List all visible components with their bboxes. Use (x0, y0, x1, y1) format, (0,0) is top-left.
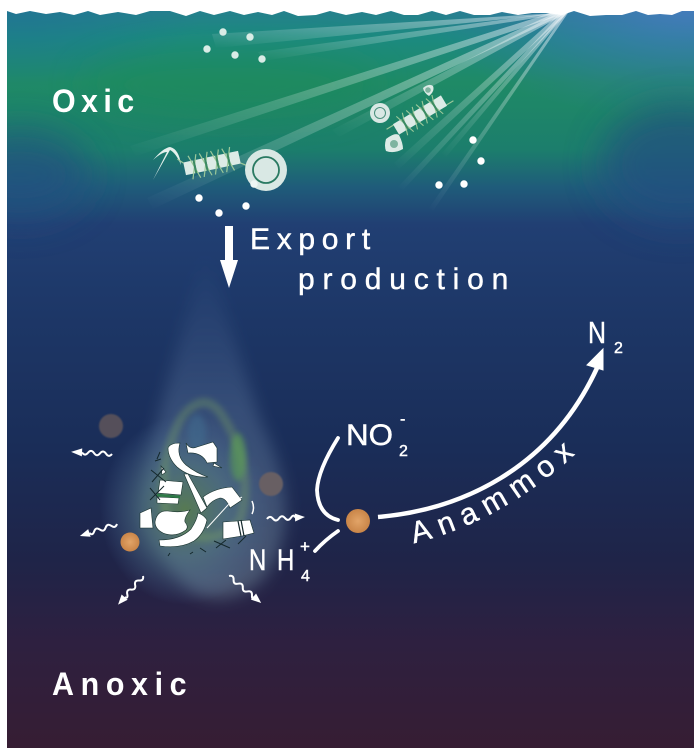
label: Anammox: Anammox (414, 442, 576, 544)
aggregate fine strands (150, 452, 254, 556)
plankton: left round cell (245, 149, 287, 191)
label: NO2-: NO (346, 419, 393, 452)
label: Export production: production (298, 263, 516, 296)
aggregate debris (140, 442, 254, 547)
wavy arrow: right (267, 513, 305, 523)
microbe: dark right (259, 472, 283, 496)
particles: right group (435, 136, 485, 189)
light beams (130, 13, 568, 211)
particles: top group (203, 28, 266, 63)
plankton: left horned cell (153, 147, 181, 180)
wavy arrow: bottom left (115, 573, 146, 607)
reaction lines into bacterium (315, 438, 338, 551)
particles: sinking group (195, 180, 258, 217)
plankton: right triangular cells (385, 85, 434, 152)
label: Export production: Export (250, 223, 377, 256)
label: Export production (250, 223, 516, 296)
microbe: dark upper left (99, 414, 123, 438)
plankton: right round cell (370, 103, 390, 123)
label: NH4+: NH (249, 542, 294, 577)
wavy arrow: lower left (79, 520, 118, 540)
microbe: orange left (120, 532, 140, 552)
label: NO2-: 2 (399, 443, 408, 460)
label: NH4+ (249, 537, 310, 585)
label: NO2-: - (400, 411, 405, 428)
wavy arrow: bottom right (226, 573, 264, 606)
plankton: right chain diatom (383, 87, 457, 143)
microbe: anammox bacterium (346, 509, 370, 533)
label: Anoxic: Anoxic (52, 666, 193, 702)
anammox arrow (378, 349, 603, 517)
label: NO2- (346, 411, 408, 460)
sinking plume (100, 250, 286, 605)
label: Oxic: Oxic (52, 83, 140, 119)
label: NH4+: + (300, 537, 310, 556)
label: N2 (588, 315, 623, 357)
export arrow (220, 226, 238, 288)
label: N2: 2 (614, 340, 623, 357)
label: N2: N (588, 315, 606, 350)
plankton: left chain diatom (177, 144, 251, 182)
label: NH4+: 4 (301, 568, 310, 585)
wavy arrow: upper left (71, 448, 112, 458)
